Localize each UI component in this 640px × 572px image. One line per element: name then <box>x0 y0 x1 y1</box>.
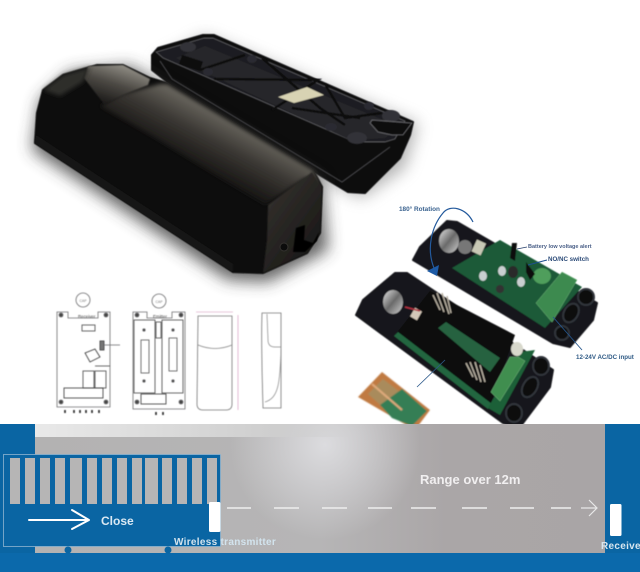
label: wireless transmitter: Wireless transmitter <box>174 537 276 548</box>
arrow: close direction <box>29 510 89 529</box>
label sticker <box>278 87 324 103</box>
callout: battery low voltage alert: Battery low voltage alert <box>528 244 592 250</box>
road surface <box>35 424 605 554</box>
photo: emitter board with battery holder <box>356 273 553 427</box>
receiver unit <box>610 504 622 536</box>
callout: 12-24V input <box>553 317 634 361</box>
photo: glossy black sensor cover <box>32 65 328 282</box>
sliding gate <box>4 454 220 554</box>
green relay cap <box>533 268 551 284</box>
gate wheels <box>64 546 72 554</box>
technical drawing: emitter board: CAP <box>156 300 163 304</box>
label: close: Close <box>101 514 134 528</box>
right blue column <box>605 424 640 554</box>
left blue column <box>0 424 35 554</box>
callout: battery leader line <box>417 360 445 387</box>
arrow: range direction <box>581 500 597 516</box>
callout: 12-24V input: 12-24V AC/DC input <box>576 354 634 361</box>
mounting holes <box>578 289 594 305</box>
technical drawing: receiver board: CAP <box>80 299 87 303</box>
technical drawing: receiver board: Receiver <box>78 314 96 319</box>
lens assembly <box>439 229 459 253</box>
label: range: Range over 12m <box>420 472 520 487</box>
callout: 180 degree rotation arrow <box>399 205 473 276</box>
photo: AA batteries pack <box>358 372 430 430</box>
bottom blue band <box>0 553 640 572</box>
technical drawing: front outline <box>196 312 238 410</box>
lens <box>383 290 403 314</box>
callout: NO/NC switch: NO/NC switch <box>548 256 589 263</box>
technical drawing: receiver board <box>57 293 120 413</box>
holes <box>533 357 549 375</box>
dashed range line <box>227 507 571 509</box>
photo: open base of the sensor housing <box>152 35 418 198</box>
callout: NO/NC switch <box>528 256 589 265</box>
battery springs <box>433 293 485 382</box>
callout: 180 degree rotation arrow: 180° Rotation <box>399 205 440 213</box>
technical drawing: emitter board <box>133 294 185 415</box>
road glow <box>220 424 440 554</box>
road top highlight <box>35 424 365 437</box>
wireless transmitter unit <box>209 502 220 532</box>
photo: receiver board in housing <box>413 221 597 347</box>
technical drawing: side outline <box>262 313 281 408</box>
technical drawing: emitter board: Emitter <box>153 314 167 319</box>
battery holder <box>395 291 515 405</box>
terminal block <box>491 357 525 401</box>
green terminal block <box>536 272 577 322</box>
